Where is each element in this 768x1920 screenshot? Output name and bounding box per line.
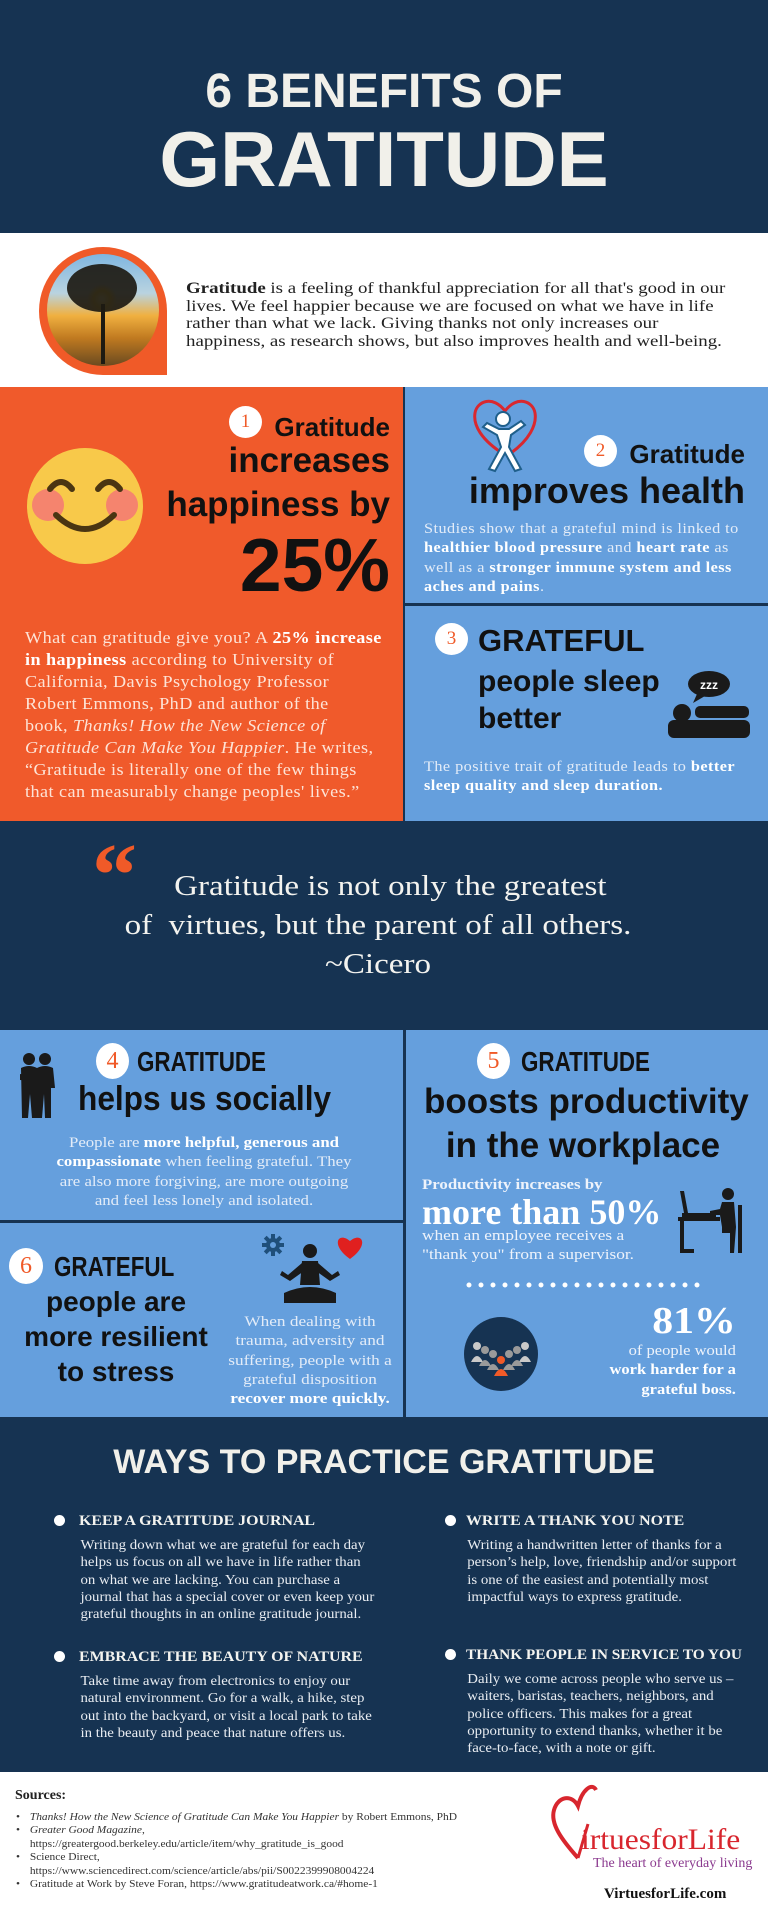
heading 4: GRATITUDE	[137, 1046, 266, 1077]
icon: smiling emoji	[27, 448, 143, 564]
number 2	[584, 435, 617, 467]
tip: thank you note: WRITE A THANK YOU NOTE	[466, 1513, 684, 1529]
heading 1: happiness by	[166, 485, 390, 524]
sources: Sources:	[15, 1788, 66, 1803]
sources: https://greatergood.berkeley.edu/article/item/why_gratitude_is_good	[30, 1838, 344, 1850]
body text 2	[424, 521, 739, 595]
stat 50%	[422, 1177, 661, 1263]
heading 1: 25%	[240, 523, 390, 607]
stat 50%: "thank you" from a supervisor.	[422, 1247, 634, 1263]
body text 2: Studies show that a grateful mind is linked to	[424, 521, 739, 537]
body text 3: The positive trait of gratitude leads to better	[424, 759, 735, 775]
body text 1: in happiness according to University of	[25, 650, 334, 669]
number 4	[96, 1043, 129, 1079]
intro text: lives. We feel happier because we are focused on what we have in life	[186, 298, 714, 315]
stat 50%: Productivity increases by	[422, 1177, 602, 1193]
heading 5: GRATITUDE	[521, 1046, 650, 1077]
tip: nature: natural environment. Go for a walk, a hike, step	[80, 1691, 364, 1706]
tip: journal: helps us focus on all we have in life rather than	[80, 1555, 361, 1570]
quote text: ~Cicero	[325, 948, 431, 980]
tip: service: opportunity to extend thanks, whether it be	[467, 1724, 722, 1739]
intro text	[186, 280, 726, 350]
tip: nature	[54, 1649, 372, 1741]
icon: hugging people	[20, 1053, 55, 1118]
heading 2: Gratitude	[629, 439, 745, 469]
tip: thank you note: is one of the easiest and potentially most	[467, 1573, 708, 1588]
sources: https://www.sciencedirect.com/science/article/abs/pii/S0022399908004224	[30, 1865, 374, 1877]
tip: journal: on what we are lacking. You can purchase a	[80, 1573, 340, 1588]
tip: journal: grateful thoughts in an online gratitude journal.	[80, 1607, 361, 1622]
number 1	[229, 406, 262, 438]
body text 1	[25, 628, 382, 801]
tip: service: Daily we come across people who serve us –	[467, 1672, 733, 1687]
body text 6: When dealing with	[244, 1314, 376, 1330]
body text 4	[56, 1135, 352, 1209]
number 6: 6	[20, 1253, 32, 1279]
sources: •	[16, 1878, 20, 1890]
number 4: 4	[106, 1048, 118, 1074]
heading 5 lines: in the workplace	[446, 1126, 720, 1165]
logo: VirtuesforLife: VirtuesforLife.com	[604, 1886, 726, 1902]
tip: service	[445, 1647, 742, 1756]
quote text	[125, 870, 631, 980]
body text 4: and feel less lonely and isolated.	[95, 1193, 313, 1209]
title	[159, 65, 609, 203]
tip: journal	[54, 1513, 374, 1622]
body text 6	[228, 1314, 392, 1407]
stat 50%: when an employee receives a	[422, 1228, 624, 1244]
icon: person at desk	[678, 1188, 742, 1253]
stat 50%: more than 50%	[422, 1192, 661, 1232]
heading 2	[469, 439, 745, 511]
panel: 3 sleep	[405, 606, 768, 821]
heading 4 line 2: helps us socially	[78, 1080, 331, 1118]
body text 3	[424, 759, 735, 794]
body text 4: People are more helpful, generous and	[69, 1135, 339, 1151]
heading 1: increases	[228, 441, 390, 480]
panel: 2 health	[405, 387, 768, 603]
heading 3: better	[478, 702, 561, 735]
tip: thank you note: Writing a handwritten letter of thanks for a	[467, 1538, 722, 1553]
icon: heart person	[473, 400, 537, 472]
icon: bed zzz: zzz	[700, 678, 718, 692]
body text 1: that can measurably change peoples' lives.”	[25, 782, 360, 801]
stat 81%	[610, 1300, 736, 1398]
panel: 1 happiness	[0, 387, 403, 821]
sources	[15, 1788, 457, 1890]
body text 2: aches and pains.	[424, 579, 544, 595]
stat 81%: of people would	[629, 1343, 736, 1359]
tip: thank you note: impactful ways to express gratitude.	[467, 1590, 682, 1605]
title: 6 BENEFITS OF	[205, 65, 563, 118]
panel: 6 resilient	[0, 1223, 403, 1417]
heading: ways to practice: WAYS TO PRACTICE GRATITUDE	[113, 1443, 655, 1481]
heading 2: improves health	[469, 470, 745, 511]
panel: 4 social	[0, 1030, 403, 1220]
tip: nature: EMBRACE THE BEAUTY OF NATURE	[79, 1649, 363, 1665]
tip: thank you note	[445, 1513, 736, 1605]
heading 3: people sleep	[478, 665, 660, 698]
stat 81%: work harder for a	[610, 1362, 736, 1378]
tip: thank you note: person’s help, love, friendship and/or support	[467, 1555, 736, 1570]
tip: journal: Writing down what we are grateful for each day	[80, 1538, 365, 1553]
quote text: Gratitude is not only the greatest	[174, 870, 607, 902]
heading 6 lines: to stress	[58, 1356, 174, 1387]
stat 81%: 81%	[652, 1300, 736, 1342]
logo: VirtuesforLife: The heart of everyday living	[593, 1856, 752, 1871]
body text 1: What can gratitude give you? A 25% increase	[25, 628, 382, 647]
icon: bed zzz	[668, 671, 750, 738]
number 3: 3	[447, 628, 456, 649]
body text 6: recover more quickly.	[230, 1391, 390, 1407]
tip: journal: KEEP A GRATITUDE JOURNAL	[79, 1513, 315, 1529]
body text 3: sleep quality and sleep duration.	[424, 778, 663, 794]
number 3	[435, 623, 468, 655]
icon: team circle	[464, 1317, 538, 1391]
tip: service: waiters, baristas, teachers, neighbors, and	[467, 1689, 714, 1704]
number 2: 2	[596, 440, 605, 461]
intro text: happiness, as research shows, but also improves health and well-being.	[186, 333, 722, 350]
number 6	[9, 1248, 43, 1284]
icon: quote mark: “	[92, 826, 137, 925]
heading 1: Gratitude	[274, 412, 390, 442]
heading 6 lines: more resilient	[24, 1321, 208, 1352]
body text 2: healthier blood pressure and heart rate as	[424, 540, 729, 556]
stat 81%: grateful boss.	[642, 1382, 736, 1398]
intro text: rather than what we lack. Giving thanks not only increases our	[186, 315, 658, 332]
tip: nature: Take time away from electronics to enjoy our	[80, 1674, 350, 1689]
heading 1	[166, 412, 390, 607]
body text 1: book, Thanks! How the New Science of	[25, 716, 326, 735]
tip: service: THANK PEOPLE IN SERVICE TO YOU	[466, 1647, 742, 1663]
body text 1: “Gratitude is literally one of the few things	[25, 760, 357, 779]
heading 6 lines: people are	[46, 1286, 186, 1317]
icon: tree photo	[39, 247, 167, 375]
sources: •	[16, 1824, 20, 1836]
quote section	[0, 821, 768, 1030]
number 5	[477, 1043, 510, 1079]
body text 1: Robert Emmons, PhD and author of the	[25, 694, 329, 713]
body text 6: grateful disposition	[243, 1372, 377, 1388]
tip: nature: in the beauty and peace that nature offers us.	[80, 1726, 345, 1741]
number 1: 1	[241, 411, 250, 432]
logo: VirtuesforLife	[551, 1784, 752, 1902]
sources: Science Direct,	[30, 1851, 100, 1863]
panel: 5 productivity	[406, 1030, 768, 1417]
body text 6: suffering, people with a	[228, 1353, 392, 1369]
body text 6: trauma, adversity and	[236, 1333, 384, 1349]
tip: service: police officers. This makes for a great	[467, 1707, 692, 1722]
dotted divider	[466, 1282, 700, 1288]
panel: intro	[0, 233, 768, 387]
heading 6: GRATEFUL	[54, 1251, 174, 1282]
icon: meditation	[262, 1234, 362, 1303]
logo: VirtuesforLife: irtuesforLife	[581, 1823, 740, 1856]
sources: Greater Good Magazine,	[30, 1824, 145, 1836]
title: GRATITUDE	[159, 115, 609, 203]
tip: journal: journal that has a special cover or even keep your	[80, 1590, 374, 1605]
body text 1: California, Davis Psychology Professor	[25, 672, 329, 691]
tip: service: face-to-face, with a note or gift.	[467, 1741, 656, 1756]
heading 6 lines	[24, 1286, 208, 1387]
sources: •	[16, 1851, 20, 1863]
heading 3: GRATEFUL	[478, 623, 644, 658]
intro text: Gratitude is a feeling of thankful appreciation for all that's good in our	[186, 280, 725, 297]
body text 4: compassionate when feeling grateful. They	[56, 1154, 352, 1170]
body text 1: Gratitude Can Make You Happier. He writes,	[25, 738, 374, 757]
tip: nature: out into the backyard, or visit a local park to take	[80, 1709, 372, 1724]
heading 5 lines	[424, 1082, 749, 1165]
sources: •	[16, 1811, 20, 1823]
heading 5 lines: boosts productivity	[424, 1082, 749, 1121]
footer	[0, 1772, 768, 1920]
header background	[0, 0, 768, 233]
heading 3	[478, 623, 660, 735]
number 5: 5	[488, 1048, 500, 1074]
quote text: of virtues, but the parent of all others.	[125, 909, 631, 941]
sources: Thanks! How the New Science of Gratitude Can Make You Happier by Robert Emmons, PhD	[30, 1811, 457, 1823]
body text 4: are also more forgiving, are more outgoing	[60, 1174, 348, 1190]
body text 2: well as a stronger immune system and less	[424, 560, 732, 576]
sources: Gratitude at Work by Steve Foran, https://www.gratitudeatwork.ca/#home-1	[30, 1878, 378, 1890]
